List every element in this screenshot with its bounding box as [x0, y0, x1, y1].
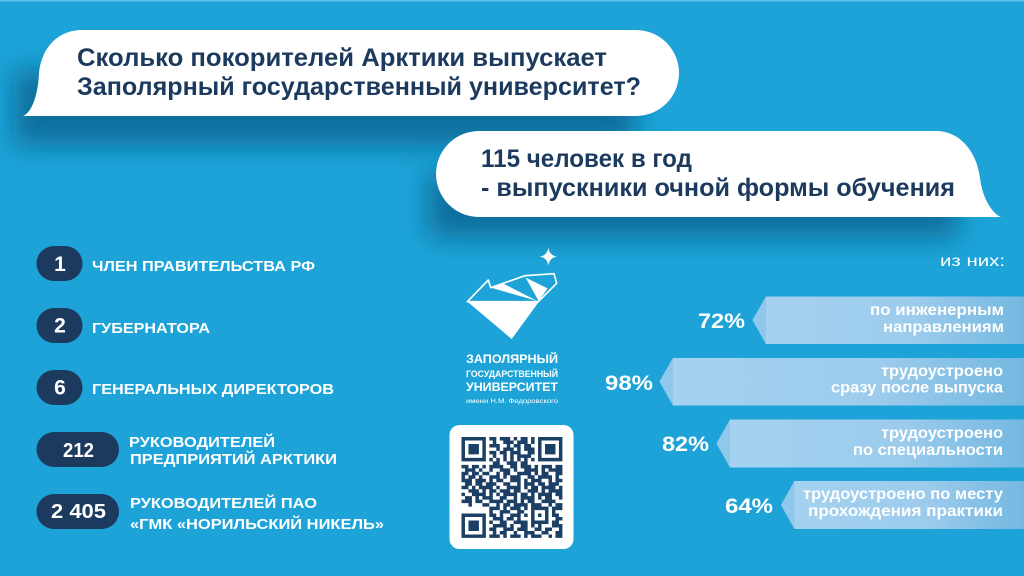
list item: 1 member of government: ЧЛЕН ПРАВИТЕЛЬСТВА РФ — [92, 259, 315, 275]
stat: 72% engineering: 72% — [698, 309, 745, 333]
stat: 82% employed in specialty: 82% — [662, 432, 709, 456]
list item: 1 member of government — [36, 246, 315, 281]
logo wordmark — [466, 353, 558, 405]
logo wordmark: ГОСУДАРСТВЕННЫЙ — [466, 368, 558, 379]
shadow: answer bubble — [428, 170, 958, 238]
QR code card — [450, 425, 574, 549]
list item: 2 governors: ГУБЕРНАТОРА — [92, 321, 211, 337]
stat: 72% engineering: по инженерным — [870, 302, 1004, 319]
heading: answer: 115 человек в год — [481, 145, 692, 173]
university logo — [466, 248, 558, 405]
list item: 212 managers: 212 — [63, 440, 94, 462]
logo wordmark: имени Н.М. Федоровского — [466, 398, 558, 405]
list item: 6 general directors: ГЕНЕРАЛЬНЫХ ДИРЕКТОРОВ — [92, 382, 334, 398]
heading: question: Заполярный государственный университет? — [77, 73, 641, 101]
stat: 82% employed in specialty: по специальности — [853, 442, 1003, 459]
left list: alumni achievements — [36, 246, 384, 533]
QR code — [462, 439, 562, 536]
heading: question: Сколько покорителей Арктики выпускает — [77, 44, 607, 72]
list item: 2405 managers: 2 405 — [51, 501, 106, 523]
list item: 212 managers: РУКОВОДИТЕЛЕЙ — [129, 433, 275, 451]
stat: 98% employed after graduation: трудоустроено — [881, 363, 1003, 380]
stat: 64% employed at internship place: 64% — [725, 494, 773, 518]
question speech bubble — [23, 30, 679, 116]
stat: 98% employed after graduation: сразу после выпуска — [831, 380, 1003, 396]
list item: 6 general directors — [36, 370, 334, 405]
stat: 98% employed after graduation: 98% — [605, 371, 653, 395]
list item: 212 managers — [36, 432, 337, 468]
list item: 6 general directors: 6 — [54, 376, 66, 400]
list item: 212 managers: ПРЕДПРИЯТИЙ АРКТИКИ — [130, 450, 337, 468]
list item: 2405 managers — [36, 494, 384, 533]
logo wordmark: УНИВЕРСИТЕТ — [466, 382, 558, 394]
heading: answer: - выпускники очной формы обучения — [481, 174, 955, 202]
answer speech bubble — [436, 131, 1001, 217]
stat: 72% engineering — [698, 296, 1024, 344]
heading: answer — [481, 145, 955, 202]
list item: 2405 managers: РУКОВОДИТЕЛЕЙ ПАО — [130, 494, 317, 512]
list item: 2405 managers: «ГМК «НОРИЛЬСКИЙ НИКЕЛЬ» — [130, 515, 384, 533]
stat: 98% employed after graduation — [605, 358, 1024, 406]
stat: 82% employed in specialty: трудоустроено — [881, 425, 1003, 442]
stat: 64% employed at internship place: трудоустроено по месту — [803, 486, 1003, 503]
logo wordmark: ЗАПОЛЯРНЫЙ — [466, 353, 558, 366]
icon: star and iceberg — [467, 248, 557, 339]
stat: 64% employed at internship place: прохождения практики — [808, 503, 1003, 520]
list item: 1 member of government: 1 — [54, 253, 66, 276]
list item: 2 governors: 2 — [54, 314, 66, 338]
stat: 72% engineering: направлениям — [883, 319, 1004, 336]
label: of them: из них: — [940, 253, 1005, 270]
stat: 82% employed in specialty — [662, 420, 1024, 468]
stat: 64% employed at internship place — [725, 481, 1024, 529]
list item: 2 governors — [36, 308, 211, 343]
heading: question — [77, 44, 641, 101]
shadow: question bubble — [14, 70, 636, 146]
